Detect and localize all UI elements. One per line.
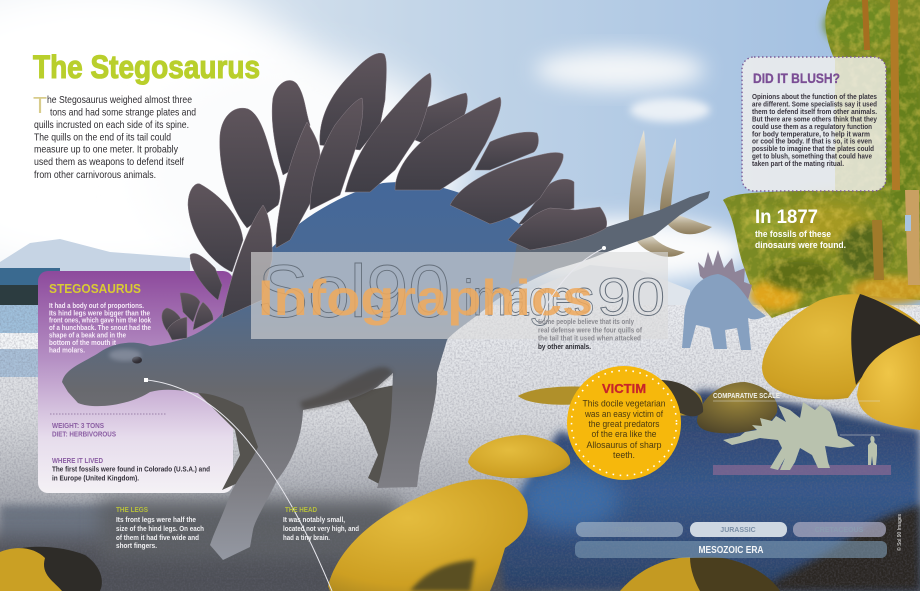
victim text xyxy=(582,398,666,460)
jurassic period: JURASSIC xyxy=(720,527,756,534)
era label: MESOZOIC ERA xyxy=(698,545,764,556)
intro text xyxy=(33,92,196,181)
watermark orange text: Infographics xyxy=(258,270,593,326)
caption: head: located not very high, and xyxy=(283,524,359,533)
panel: did it blush xyxy=(742,57,886,191)
image credit: © Sol 90 Images xyxy=(896,513,903,551)
description text: of a hunchback. The snout had the xyxy=(49,323,151,332)
victim text: Allosaurus of sharp xyxy=(586,440,662,450)
caption: front legs: of them it had five wide and xyxy=(116,533,199,542)
intro text: tons and had some strange plates and xyxy=(50,106,196,118)
callout: in 1877: the fossils of these xyxy=(755,229,831,240)
where it lived: WHERE IT LIVED xyxy=(52,456,103,465)
blush text: taken part of the mating ritual. xyxy=(752,159,844,168)
tail spikes xyxy=(629,130,712,257)
victim text: This docile vegetarian xyxy=(582,398,666,408)
leader line: tail xyxy=(540,248,604,320)
watermark outlined text: images xyxy=(464,270,594,326)
victim text: of the era like the xyxy=(592,429,656,439)
text: tail defense xyxy=(538,317,642,351)
blush text: are different. Some specialists say it used xyxy=(752,100,877,108)
eye xyxy=(132,356,142,364)
blush text: them to defend itself from other animals. xyxy=(752,107,877,116)
watermark outlined text: 90 xyxy=(597,268,665,327)
description text: It had a body out of proportions. xyxy=(49,301,144,310)
caption: head: had a tiny brain. xyxy=(283,533,330,542)
victim text: the great predators xyxy=(588,419,660,429)
where it lived: The first fossils were found in Colorado (U.S.A.) and xyxy=(52,464,210,474)
cretaceous period xyxy=(793,522,886,537)
tail xyxy=(510,191,710,285)
panel: stegosaurus facts xyxy=(38,271,233,493)
weight and diet: DIET: HERBIVOROUS xyxy=(52,430,116,438)
description text: bottom of the mouth it xyxy=(49,338,116,347)
text: tail defense: the tail that it used when attacked xyxy=(538,334,641,342)
where it lived: in Europe (United Kingdom). xyxy=(52,474,139,482)
leader line: head xyxy=(147,380,332,591)
intro text: T xyxy=(33,92,47,118)
caption: head: It was notably small, xyxy=(283,515,345,524)
intro text: The quills on the end of its tail could xyxy=(34,132,171,144)
comparative scale chart xyxy=(713,393,891,475)
body, head and legs xyxy=(62,182,607,560)
watermark outlined text xyxy=(258,250,665,333)
distant stegosaurus xyxy=(682,250,766,350)
victim heading: VICTIM xyxy=(602,381,646,396)
caption: front legs: Its front legs were half the xyxy=(116,515,196,524)
description text: shape of a beak and in the xyxy=(49,330,126,340)
watermark band xyxy=(251,250,668,339)
triassic period: TRIASSIC xyxy=(614,527,646,534)
where it lived xyxy=(52,456,210,482)
victim text: teeth. xyxy=(613,450,635,460)
leader dot: tail xyxy=(602,246,606,250)
back row of plates xyxy=(162,53,574,332)
description text: had molars. xyxy=(49,346,85,354)
main stegosaurus illustration xyxy=(62,53,712,560)
description text: Its hind legs were bigger than the xyxy=(49,308,150,318)
heading: stegosaurus: STEGOSAURUS xyxy=(49,281,141,296)
callout: victim xyxy=(567,366,681,480)
ground bar xyxy=(713,465,891,475)
blush text: or cool the body. If that is so, it is even xyxy=(752,136,872,146)
large rocks xyxy=(762,294,920,399)
description text: front ones, which gave him the look xyxy=(49,316,152,324)
intro text: he Stegosaurus weighed almost three xyxy=(47,94,192,106)
distant foliage block xyxy=(723,0,920,318)
caption: front legs: size of the hind legs. On each xyxy=(116,524,204,533)
caption: head: THE HEAD xyxy=(285,505,317,514)
intro text: from other carnivorous animals. xyxy=(34,169,156,181)
jurassic period xyxy=(690,522,787,537)
callout: in 1877: In 1877 xyxy=(755,207,818,228)
blush text: for body temperature, to help it warm xyxy=(752,130,870,138)
callout: in 1877 xyxy=(755,207,846,251)
weight and diet: WEIGHT: 3 TONS xyxy=(52,421,104,430)
caption: front legs: short fingers. xyxy=(116,541,157,550)
blush text: possible to imagine that the plates could xyxy=(752,144,874,153)
snout highlight xyxy=(109,349,141,361)
description text xyxy=(49,301,152,354)
caption: front legs: THE LEGS xyxy=(116,505,148,514)
text: tail defense: real defense were the four quills of xyxy=(538,326,642,334)
cretaceous period: CRETACEOUS xyxy=(815,527,864,534)
caption: head xyxy=(283,505,359,542)
scale heading: COMPARATIVE SCALE xyxy=(713,393,780,400)
blush text: get to blush, something that could have xyxy=(752,152,872,160)
watermark outlined text: Sol90 xyxy=(258,250,450,333)
blush text: could use them as a regulatory function xyxy=(752,122,872,131)
human silhouette xyxy=(868,436,877,465)
blush text xyxy=(752,92,877,168)
blush text: Opinions about the function of the plates xyxy=(752,92,877,101)
intro text: used them as weapons to defend itself xyxy=(34,156,184,168)
callout: in 1877: dinosaurs were found. xyxy=(755,240,846,251)
weight and diet xyxy=(52,421,116,438)
intro text: quills incrusted on each side of its spine. xyxy=(34,119,189,131)
title: The Stegosaurus xyxy=(33,49,260,85)
leader dot: head xyxy=(144,378,148,382)
text: tail defense: Some people believe that its only xyxy=(538,317,635,326)
blush text: But there are some others think that they xyxy=(752,114,877,124)
belly shadow xyxy=(300,367,393,410)
caption: front legs xyxy=(116,505,204,550)
stegosaurus silhouette xyxy=(723,402,855,470)
geological timeline xyxy=(575,522,887,558)
far legs xyxy=(197,385,395,490)
triassic period xyxy=(576,522,683,537)
intro text: measure up to one meter. It probably xyxy=(34,144,179,156)
front row of plates xyxy=(167,73,607,340)
text: tail defense: by other animals. xyxy=(538,342,591,351)
victim text: was an easy victim of xyxy=(584,409,663,419)
heading: did it blush: DID IT BLUSH? xyxy=(753,70,840,86)
